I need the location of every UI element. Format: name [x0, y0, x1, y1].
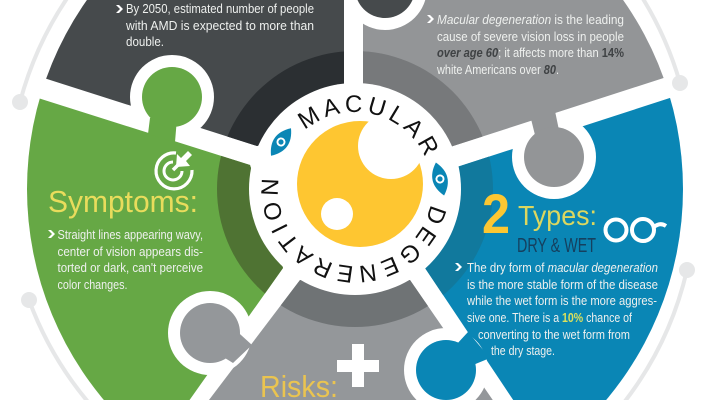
outer arc: bottom right [618, 262, 695, 400]
text block: types: the dry stage. [491, 344, 555, 358]
text block: statistics [116, 2, 314, 49]
heading: 2 Types: Types: [518, 200, 597, 231]
text block: types: is the more stable form of the disease [467, 278, 658, 292]
outer arc: top right [640, 0, 688, 91]
outer arc: bottom left [21, 292, 95, 400]
panel: types, blue segment [425, 98, 683, 400]
text block: types: The dry form of macular degeneration [467, 261, 658, 275]
puzzle knob: blue into risks [404, 328, 490, 400]
subheading: dry and wet: DRY & WET [517, 235, 596, 257]
outer arc: top left [12, 0, 70, 110]
panel: risks, grey segment [209, 280, 493, 400]
text block: statistics: with AMD is expected to more than [125, 19, 314, 33]
text block: statistics: double. [126, 35, 164, 49]
heading: 2 Types [482, 182, 597, 245]
text block: prevalence [427, 13, 624, 77]
text block: symptoms: center of vision appears dis- [58, 245, 203, 259]
circular title: DEGENERATION: DEGENERATION [261, 180, 446, 283]
heading: 2 Types: 2 [482, 182, 510, 245]
text block: prevalence: over age 60; it affects more than 14% [437, 46, 624, 60]
icon: glasses [606, 219, 666, 241]
puzzle knob: grey into blue [512, 111, 596, 199]
heading: Symptoms: Symptoms: [48, 184, 198, 219]
puzzle knob: dark into grey [343, 0, 427, 30]
puzzle knob: green into dark [130, 55, 214, 142]
text block: prevalence: cause of severe vision loss in people [437, 30, 624, 44]
text block: statistics: By 2050, estimated number of people [126, 2, 314, 16]
text block: symptoms: torted or dark, can't perceive [58, 261, 203, 275]
text block: types: while the wet form is the more aggres- [466, 294, 657, 308]
text block: prevalence: Macular degeneration is the leading [437, 13, 624, 27]
puzzle knob: risks into green [168, 291, 252, 375]
text block: prevalence: white Americans over 80. [436, 63, 559, 77]
circular title: MACULAR: MACULAR [297, 95, 438, 156]
text block: symptoms: color changes. [58, 278, 128, 292]
central white disc [249, 83, 461, 295]
panel: symptoms, green segment [27, 98, 283, 400]
text block: symptoms: Straight lines appearing wavy, [58, 228, 203, 242]
yellow eye illustration [297, 113, 424, 247]
icon: right eye [429, 161, 451, 197]
panel: statistics, dark segment [46, 0, 344, 146]
text block: symptoms [48, 228, 203, 292]
panel: prevalence, grey segment [363, 0, 664, 146]
icon: plus [337, 344, 379, 387]
text block: types: converting to the wet form from [478, 328, 630, 342]
icon: target with arrow [156, 151, 192, 189]
text block: types: sive one. There is a 10% chance of [467, 311, 632, 325]
text block: types [455, 261, 658, 358]
central white spokes [344, 70, 363, 100]
icon: left eye [265, 124, 297, 160]
